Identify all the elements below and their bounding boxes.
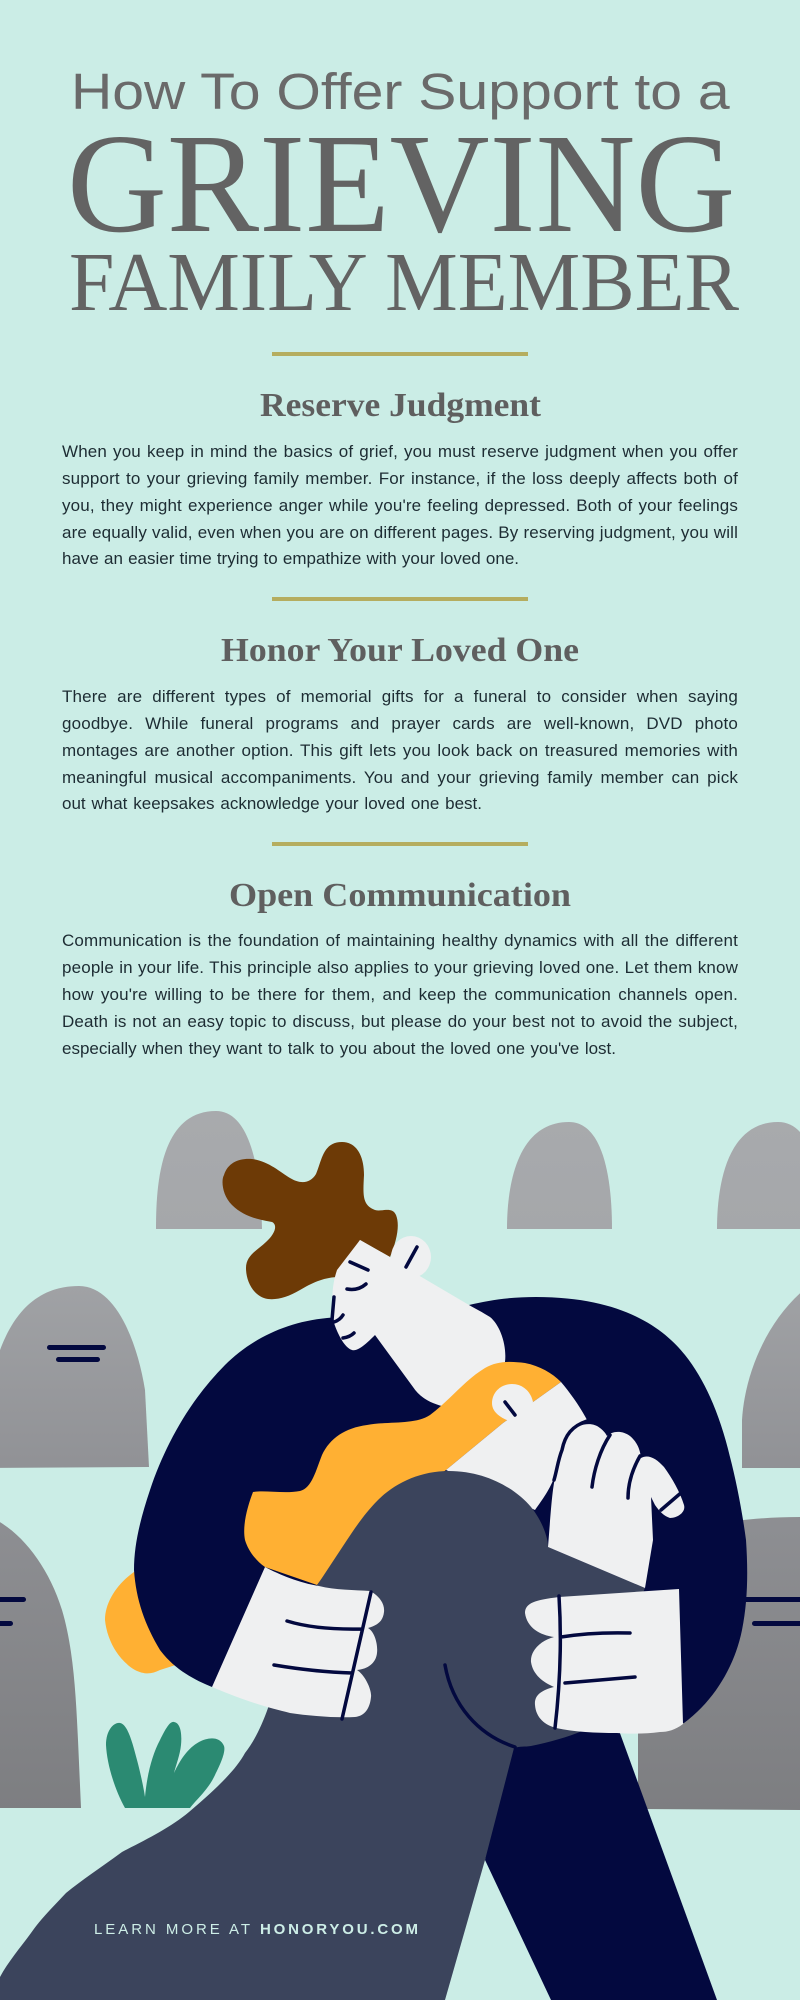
tombstone: lower right — [638, 1517, 800, 1810]
footer call to action — [94, 1921, 418, 1938]
text block: honor your loved one: goodbye. While funeral programs and prayer cards are well-known, DVD photo — [62, 714, 738, 733]
text block: reserve judgment: support to your grieving family member. For instance, if the loss deeply affects both of — [62, 469, 738, 488]
text block: open communication: people in your life. This principle also applies to your grieving loved one. Let them know — [62, 958, 738, 977]
text block: reserve judgment: you, they might experience anger while you're feeling depressed. Both of your feelings — [62, 496, 738, 515]
divider — [272, 842, 528, 846]
text block: honor your loved one: meaningful musical accompaniments. You and your grieving family member can pick — [62, 768, 738, 787]
heading: honor your loved one: Honor Your Loved One — [221, 632, 579, 669]
footer call to action: HONORYOU.COM — [260, 1921, 418, 1938]
text block: reserve judgment: When you keep in mind the basics of grief, you must reserve judgment when you offer — [62, 442, 738, 461]
title: FAMILY MEMBER — [69, 235, 740, 328]
text block: honor your loved one — [62, 687, 738, 813]
tombstone: middle left — [0, 1286, 149, 1468]
upper hand on back — [548, 1421, 684, 1588]
title: How To Offer Support to a — [71, 64, 731, 120]
text block: reserve judgment: have an easier time trying to empathize with your loved one. — [62, 549, 519, 568]
text block: honor your loved one: montages are another option. This gift lets you look back on treasured memories with — [62, 741, 738, 760]
right hand — [525, 1589, 683, 1734]
upper figure face and neck — [332, 1236, 505, 1407]
tombstone: middle right — [742, 1285, 800, 1468]
tombstone: lower left — [0, 1517, 81, 1808]
arc line on slate body — [445, 1665, 515, 1747]
text block: open communication — [62, 931, 738, 1058]
plant — [106, 1722, 224, 1808]
heading: open communication: Open Communication — [229, 877, 571, 914]
text block: honor your loved one: There are different types of memorial gifts for a funeral to consider when saying — [62, 687, 738, 706]
slate body — [0, 1471, 645, 2000]
orange hair — [244, 1362, 561, 1585]
text block: reserve judgment — [62, 442, 738, 568]
heading: reserve judgment: Reserve Judgment — [260, 387, 542, 424]
text block: open communication: Communication is the foundation of maintaining healthy dynamics with all the different — [62, 931, 738, 950]
brown hair — [223, 1142, 398, 1299]
text block: open communication: how you're willing to be there for them, and keep the communication channels open. — [62, 985, 738, 1004]
navy legs — [485, 1725, 717, 2000]
tombstones: back row — [156, 1111, 800, 1229]
navy body — [134, 1297, 747, 1723]
text block: honor your loved one: out what keepsakes acknowledge your loved one best. — [62, 794, 482, 813]
divider — [272, 597, 528, 601]
illustration: embracing figures in a graveyard — [0, 1111, 800, 2000]
title — [67, 64, 740, 328]
hair bun: orange — [105, 1568, 185, 1673]
text block: open communication: especially when they want to talk to you about the loved one you've lost. — [62, 1039, 616, 1058]
footer call to action: LEARN MORE AT — [94, 1921, 250, 1938]
text block: open communication: Death is not an easy topic to discuss, but please do your best not to avoid the subject, — [62, 1012, 738, 1031]
divider — [272, 352, 528, 356]
title: GRIEVING — [67, 105, 735, 262]
left hand — [212, 1567, 384, 1719]
lower figure neck and ear — [446, 1382, 587, 1510]
text block: reserve judgment: are equally valid, even when you are on different pages. By reserving judgment, you will — [62, 523, 738, 542]
